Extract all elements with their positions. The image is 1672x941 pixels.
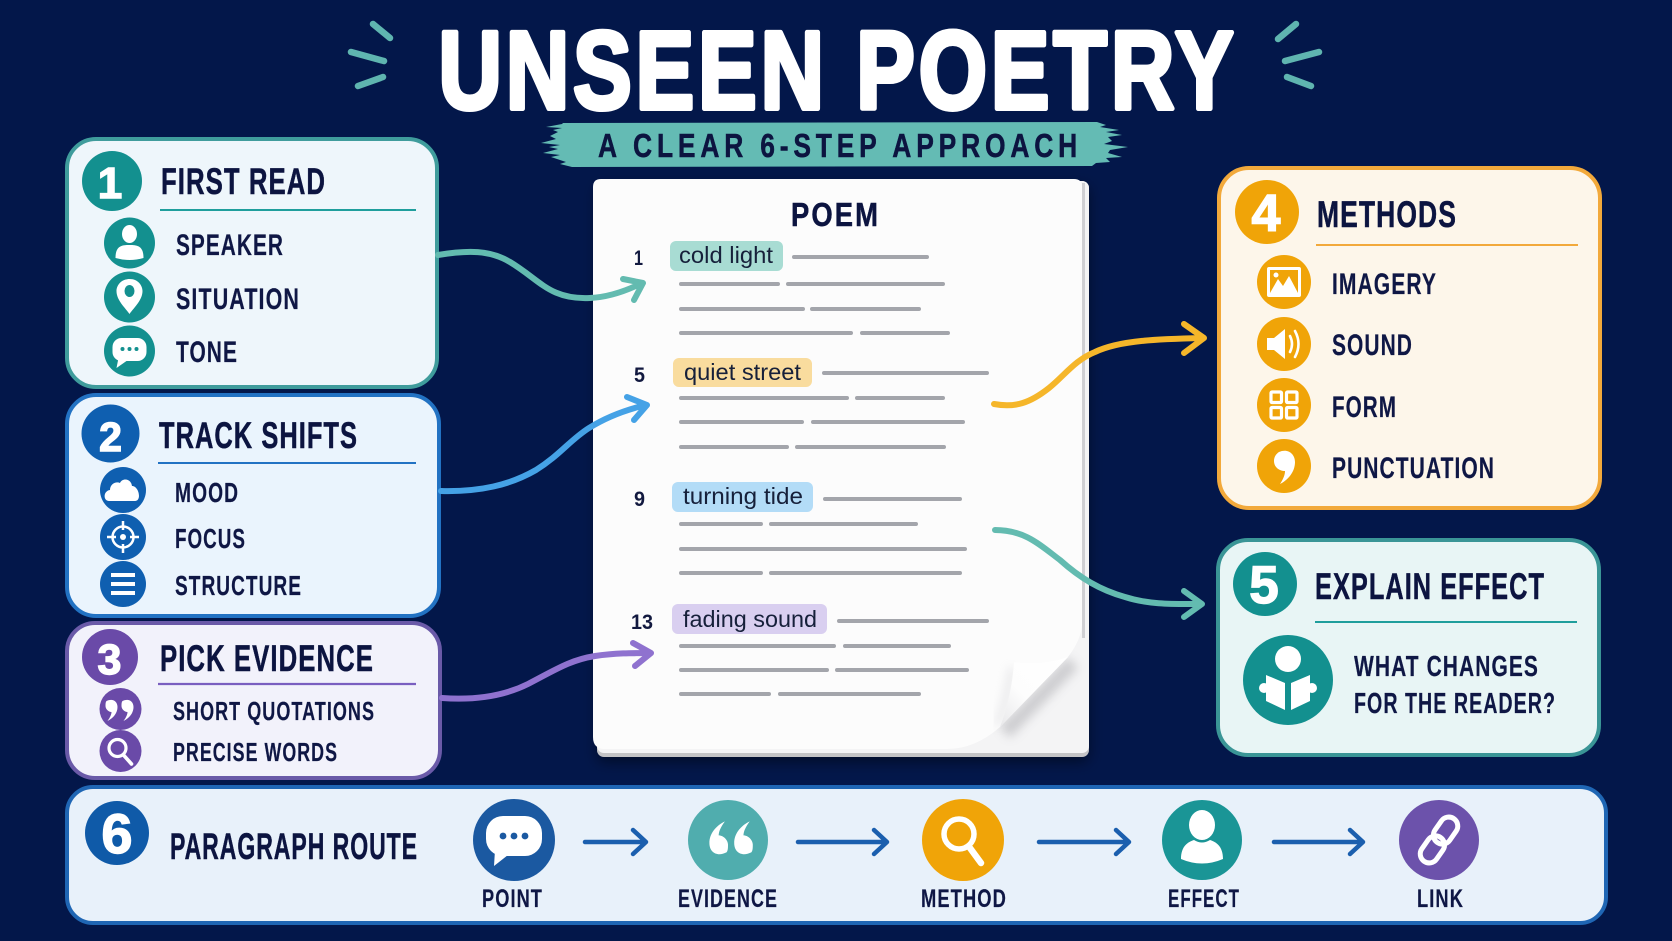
arrow 4 <box>1274 830 1363 854</box>
stanza 2: 5 <box>634 364 645 387</box>
arrow 2 <box>798 830 887 854</box>
icon: evidence quotation marks <box>688 800 768 880</box>
icon: method magnifier <box>922 799 1004 881</box>
heading explain effect: EXPLAIN EFFECT <box>1315 566 1545 607</box>
panel 3: pick evidence <box>67 623 440 778</box>
icon: point speech bubble <box>473 799 555 881</box>
stanza 4: fading sound <box>683 606 817 632</box>
label focus: FOCUS <box>175 523 246 554</box>
label precise words: PRECISE WORDS <box>173 737 338 767</box>
arrow 1 <box>585 830 646 854</box>
label method: METHOD <box>921 885 1007 913</box>
heading methods: METHODS <box>1317 194 1457 235</box>
heading track shifts: TRACK SHIFTS <box>159 415 358 456</box>
stanza 4: 13 <box>631 611 653 634</box>
stanza 3: turning tide <box>683 483 803 509</box>
icon: speaker person <box>104 218 155 268</box>
label sound: SOUND <box>1332 329 1413 362</box>
number badge 1: 1 <box>98 159 122 208</box>
icon: crosshair focus <box>100 514 146 560</box>
icon: reader with book <box>1243 635 1333 725</box>
icon: quotation marks <box>100 688 142 730</box>
poem page <box>593 179 1089 757</box>
number badge 6: 6 <box>101 802 133 865</box>
label link: LINK <box>1417 885 1464 913</box>
text: what changes for the reader: WHAT CHANGES <box>1354 651 1539 683</box>
number badge 4: 4 <box>1252 185 1281 243</box>
stanza 4 <box>631 604 987 694</box>
icon: grid form <box>1257 378 1311 432</box>
panel 4: methods <box>1219 168 1600 508</box>
label structure: STRUCTURE <box>175 570 302 601</box>
stanza 1 <box>634 241 948 333</box>
panel 5: explain effect <box>1218 540 1599 755</box>
arrow 3 <box>1039 830 1129 854</box>
label imagery: IMAGERY <box>1332 268 1437 301</box>
icon: magnifier words <box>100 730 142 772</box>
subtitle banner: A CLEAR 6-STEP APPROACH <box>598 127 1082 164</box>
label punctuation: PUNCTUATION <box>1332 452 1495 485</box>
icon: image imagery <box>1257 255 1311 309</box>
stanza 3 <box>634 482 965 573</box>
stanza 2 <box>634 358 987 447</box>
label effect: EFFECT <box>1168 885 1240 913</box>
icon: location pin <box>104 272 155 322</box>
number badge 6 <box>85 801 149 865</box>
icon: speech bubble tone <box>104 326 155 376</box>
number badge 1 <box>82 151 142 211</box>
panel 6: paragraph route <box>67 787 1606 923</box>
label short quotations: SHORT QUOTATIONS <box>173 696 375 726</box>
label mood: MOOD <box>175 477 239 508</box>
arrow: track shifts to poem <box>441 397 647 491</box>
icon: link chain <box>1399 800 1479 880</box>
icon: right title burst <box>1278 24 1319 86</box>
heading paragraph route: PARAGRAPH ROUTE <box>170 826 418 867</box>
label situation: SITUATION <box>176 283 300 316</box>
arrow: poem to methods <box>994 324 1204 405</box>
stanza 1: 1 <box>634 247 643 270</box>
subtitle banner <box>541 122 1128 167</box>
number badge 4 <box>1235 180 1299 244</box>
stanza 1: cold light <box>679 242 773 268</box>
icon: lines structure <box>100 561 146 607</box>
label point: POINT <box>482 885 543 913</box>
number badge 5: 5 <box>1249 556 1279 615</box>
label evidence: EVIDENCE <box>678 885 778 913</box>
icon: left title burst <box>351 24 390 86</box>
heading first read: FIRST READ <box>161 161 326 202</box>
page curl <box>998 657 1068 727</box>
icon: speaker sound <box>1257 317 1311 371</box>
number badge 3: 3 <box>98 636 121 684</box>
stanza 3: 9 <box>634 488 645 511</box>
arrow: first read to poem <box>438 252 643 300</box>
stanza 2: quiet street <box>684 359 801 385</box>
icon: cloud mood <box>100 467 146 513</box>
poem heading: POEM <box>791 196 880 233</box>
icon: effect person <box>1162 800 1242 880</box>
arrow: pick evidence to poem <box>442 643 651 699</box>
text: what changes for the reader <box>1354 651 1556 720</box>
number badge 3 <box>82 629 138 685</box>
number badge 2 <box>82 404 140 462</box>
label form: FORM <box>1332 391 1397 424</box>
label tone: TONE <box>176 336 238 369</box>
arrow: poem to explain effect <box>995 530 1202 617</box>
panel 2: track shifts <box>67 395 439 616</box>
number badge 5 <box>1233 552 1297 616</box>
curl shadow <box>1000 657 1078 738</box>
icon: comma punctuation <box>1257 439 1311 493</box>
title: UNSEEN POETRY <box>438 10 1238 132</box>
label speaker: SPEAKER <box>176 229 284 262</box>
number badge 2: 2 <box>99 414 122 460</box>
text: what changes for the reader: FOR THE READER? <box>1354 688 1556 720</box>
panel 1: first read <box>67 139 437 387</box>
heading pick evidence: PICK EVIDENCE <box>160 638 374 679</box>
